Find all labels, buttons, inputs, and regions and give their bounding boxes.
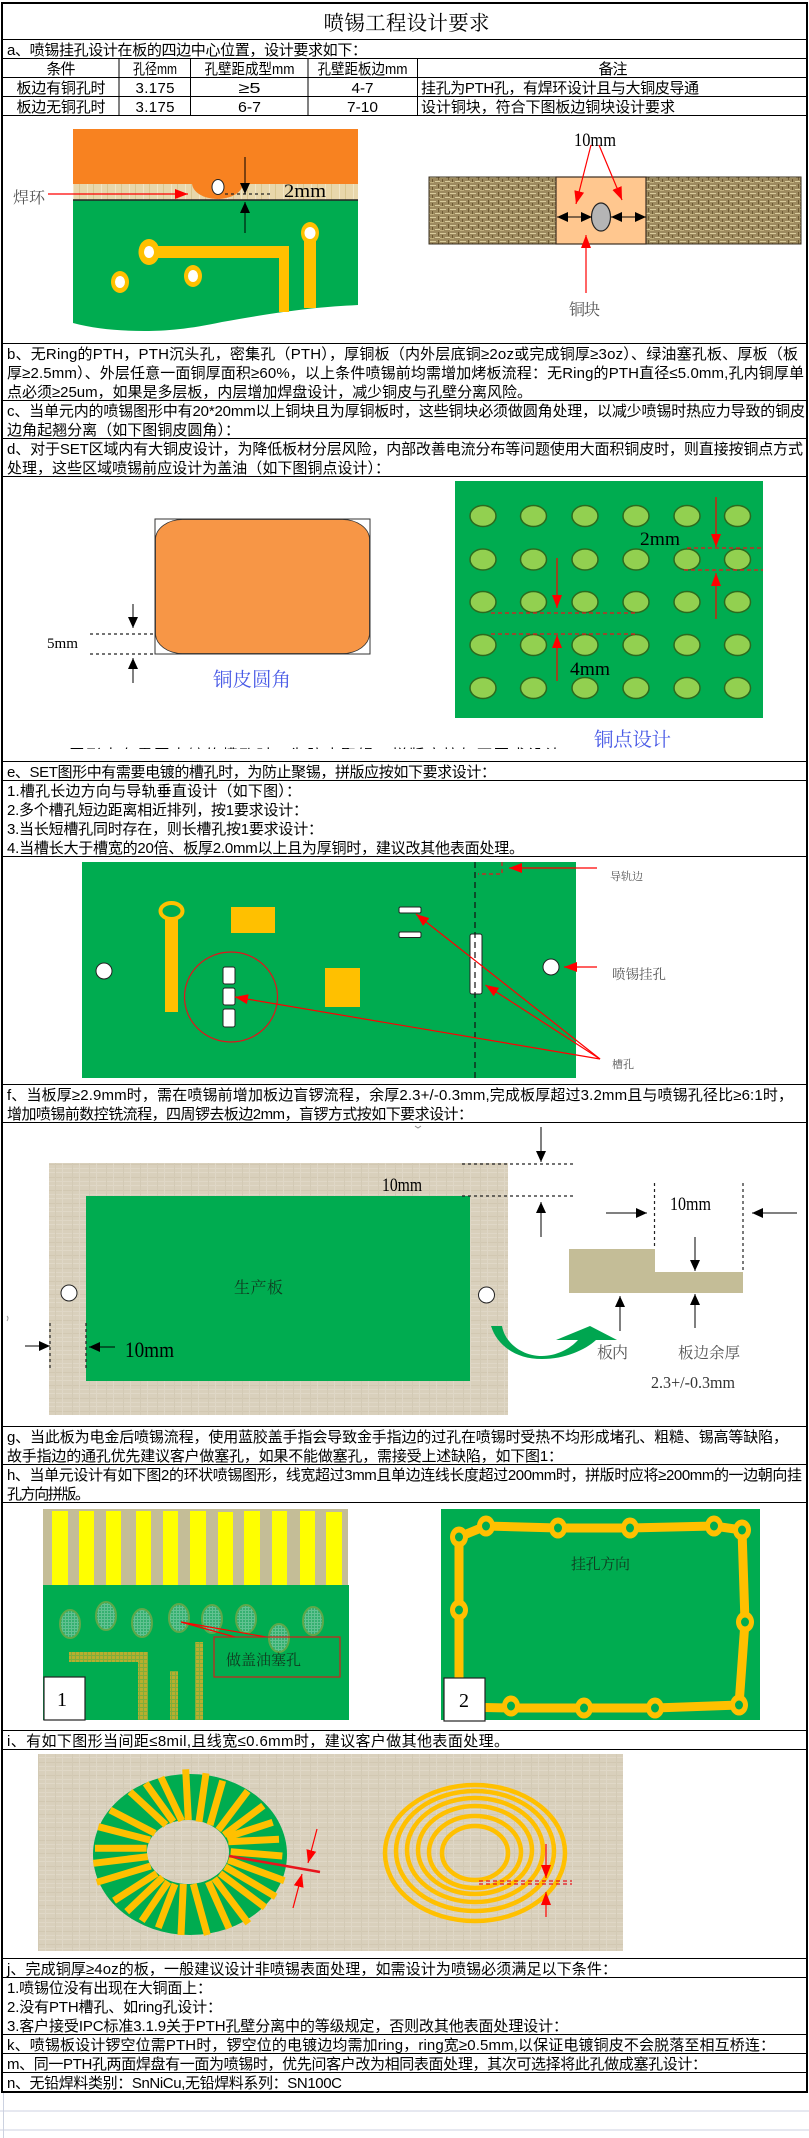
section j list: 2.没有PTH槽孔、如ring孔设计：: [7, 1999, 222, 2016]
section j list: 3.客户接受IPC标准3.1.9关于PTH孔壁分离中的等级规定，否则改其他表面处理设计：: [7, 2017, 568, 2035]
hatched traces: [69, 1642, 203, 1720]
section e list: 2.多个槽孔短边距离相近排列，按1要求设计：: [7, 802, 308, 819]
figure 1: gold finger plugged vias: [43, 1509, 349, 1720]
figure: fine line patterns: [38, 1754, 623, 1951]
table header row: 孔壁距板边mm: [318, 60, 408, 78]
figure: hole ring at board edge: 2mm: [284, 181, 326, 202]
plugged vias: [60, 1602, 323, 1652]
label: solder ring: 焊环: [13, 189, 46, 207]
table row: copper hole: 挂孔为PTH孔，有焊环设计且与大铜皮导通: [421, 80, 699, 97]
clipped text sliver: e、SET图形中有需要电镀的槽孔时，为防止聚锡，拼版应按如下要求设计：: [7, 746, 577, 764]
section c text: [7, 402, 805, 439]
figure: blind routing section detail: 板边余厚: [678, 1344, 740, 1362]
figure: edge copper block: 铜块: [569, 301, 600, 319]
section d text: d、对于SET区域内有大铜皮设计，为降低板材分层风险，内部改善电流分布等问题使用大面积铜皮时，则直接按铜点方式: [7, 440, 803, 458]
dot grid: [470, 506, 750, 698]
green board with traces: [73, 200, 358, 331]
table row: no copper hole: [16, 98, 675, 116]
table row: no copper hole: 板边无铜孔时: [16, 98, 106, 116]
table header row: 备注: [598, 61, 628, 78]
figure: copper dot design: [455, 481, 763, 718]
figure 2: ring pattern: 挂孔方向: [571, 1555, 630, 1573]
section h text: [7, 1466, 802, 1503]
section e list: 1.槽孔长边方向与导轨垂直设计（如下图）：: [7, 783, 301, 800]
section g text: g、当此板为电金后喷锡流程，使用蓝胶盖手指会导致金手指边的过孔在喷锡时受热不均形成堵孔、粗糙、锡高等缺陷，: [7, 1428, 788, 1446]
table row: no copper hole: 3.175: [136, 99, 174, 116]
figure: blind routing section detail: 2.3+/-0.3mm: [651, 1373, 735, 1392]
section j text: j、完成铜厚≥4oz的板，一般建议设计非喷锡表面处理，如需设计为喷锡必须满足以下条件：: [6, 1960, 617, 1978]
figure: slot orientation panel: 喷锡挂孔: [612, 966, 666, 982]
section f text: 增加喷锡前数控铣流程，四周锣去板边2mm，盲锣方式按如下要求设计：: [7, 1105, 473, 1123]
figure: blind routing panel: [7, 1126, 575, 1415]
section g text: [7, 1428, 788, 1465]
figure: slot orientation panel: 导轨边: [610, 869, 643, 883]
section i text: i、有如下图形当间距≤8mil,且线宽≤0.6mm时，建议客户做其他表面处理。: [7, 1733, 509, 1750]
section e list: 3.当长短槽孔同时存在，则长槽孔按1要求设计：: [7, 821, 323, 838]
figure: rounded copper corner: [47, 519, 370, 691]
table row: copper hole: ≥5: [238, 80, 260, 97]
label box 2: 2: [459, 1690, 469, 1712]
figure: blind routing panel: 生产板: [234, 1279, 283, 1297]
figure: blind routing section detail: [569, 1183, 797, 1392]
concentric rings: [385, 1785, 572, 1921]
section h text: h、当单元设计有如下图2的环状喷锡图形，线宽超过3mm且单边连线长度超过200mm时，拼版时应将≥200mm的一边朝向挂: [7, 1466, 802, 1484]
table row: copper hole: [16, 79, 699, 97]
table row: no copper hole: 6-7: [238, 99, 261, 116]
table row: copper hole: 4-7: [352, 80, 374, 97]
figure: edge copper block: 10mm: [574, 130, 616, 151]
table row: copper hole: 3.175: [136, 80, 174, 97]
table header row: 孔径mm: [133, 61, 177, 78]
icon: green curved arrow: [491, 1326, 617, 1359]
figure: blind routing panel: 10mm: [125, 1337, 174, 1362]
table: hole requirements: [16, 60, 699, 116]
section n text: n、无铅焊料类别：SnNiCu,无铅焊料系列：SN100C: [7, 2075, 342, 2092]
callout: plugged hole: [181, 1622, 340, 1677]
section e list: [7, 783, 524, 857]
figure: blind routing section detail: 10mm: [670, 1194, 711, 1215]
section k text: k、喷锡板设计锣空位需PTH时，锣空位的电镀边均需加ring，ring宽≥0.5mm,以保证电镀铜皮不会脱落至相互桥连：: [7, 2036, 775, 2054]
figure: hole ring at board edge: [13, 129, 358, 331]
section f text: f、当板厚≥2.9mm时，需在喷锡前增加板边盲锣流程，余厚2.3+/-0.3mm,完成板厚超过3.2mm且与喷锡孔径比≥6:1时，: [7, 1086, 793, 1104]
section d text: [7, 440, 803, 477]
figure: slot orientation panel: [82, 862, 666, 1078]
section b text: b、无Ring的PTH，PTH沉头孔，密集孔（PTH），厚铜板（内外层底铜≥2oz或完成铜厚≥3oz）、绿油塞孔板、厚板（板: [7, 345, 798, 363]
figure: blind routing panel: 10mm: [382, 1175, 422, 1196]
section g text: 故手指边的通孔优先建议客户做塞孔，如果不能做塞孔，需接受上述缺陷，如下图1：: [7, 1447, 563, 1465]
hanging holes: [96, 959, 559, 979]
table row: no copper hole: 设计铜块，符合下图板边铜块设计要求: [421, 98, 675, 116]
table row: copper hole: 板边有铜孔时: [16, 79, 106, 97]
figure 2: ring pattern: [441, 1509, 760, 1721]
radial spoke ring: [93, 1769, 320, 1935]
section h text: 孔方向拼版。: [7, 1486, 90, 1503]
figure: blind routing section detail: 板内: [597, 1344, 628, 1362]
section a text: a、喷锡挂孔设计在板的四边中心位置，设计要求如下：: [7, 41, 367, 59]
table header row: 条件: [46, 61, 76, 78]
table header row: [46, 60, 628, 78]
section f text: [7, 1086, 793, 1123]
figure: edge copper block: [429, 130, 801, 319]
background spreadsheet gridlines: [0, 2092, 809, 2138]
section d text: 处理，这些区域喷锡前应设计为盖油（如下图铜点设计）：: [7, 459, 390, 477]
section b text: [7, 345, 804, 401]
label box 2: [444, 1678, 485, 1721]
section e list: 4.当槽长大于槽宽的20倍、板厚2.0mm以上且为厚铜时，建议改其他表面处理。: [7, 839, 524, 857]
callout: plugged hole: 做盖油塞孔: [226, 1651, 301, 1669]
title: 喷锡工程设计要求: [324, 12, 490, 35]
label box 1: [44, 1677, 85, 1720]
figure: copper dot design: 4mm: [570, 659, 610, 680]
figure: slot orientation panel: 槽孔: [612, 1057, 634, 1071]
gold fingers: [52, 1511, 342, 1585]
table header row: 孔壁距成型mm: [204, 61, 294, 78]
section b text: 点必须≥25um，如果是多层板，内层增加焊盘设计，减少铜皮与孔壁分离风险。: [7, 383, 532, 401]
figure: rounded copper corner: 铜皮圆角: [213, 669, 291, 691]
section e heading: e、SET图形中有需要电镀的槽孔时，为防止聚锡，拼版应按如下要求设计：: [7, 763, 496, 781]
figure: copper dot design: 2mm: [640, 529, 680, 550]
ring pads: [450, 1516, 754, 1718]
section m text: m、同一PTH孔两面焊盘有一面为喷锡时，优先问客户改为相同表面处理，其次可选择将此孔做成塞孔设计：: [7, 2055, 707, 2073]
section b text: 厚≥2.5mm）、外层任意一面铜厚面积≥60%，以上条件喷锡前均需增加烤板流程：无Ring的PTH直径≤5.0mm,孔内铜厚单: [7, 364, 804, 382]
slots: [223, 907, 482, 1027]
label box 1: 1: [57, 1689, 67, 1711]
section c text: c、当单元内的喷锡图形中有20*20mm以上铜块且为厚铜板时，这些铜块必须做圆角处理，以减少喷锡时热应力导致的铜皮: [7, 402, 805, 420]
figure: rounded copper corner: 5mm: [47, 636, 78, 652]
section c text: 边角起翘分离（如下图铜皮圆角）：: [7, 422, 240, 439]
section j list: 1.喷锡位没有出现在大铜面上：: [7, 1980, 212, 1997]
table row: no copper hole: 7-10: [347, 99, 378, 116]
ring pad and trace: [160, 903, 182, 1012]
section j list: [7, 1980, 568, 2035]
caption: copper dot design: 铜点设计: [594, 729, 671, 751]
